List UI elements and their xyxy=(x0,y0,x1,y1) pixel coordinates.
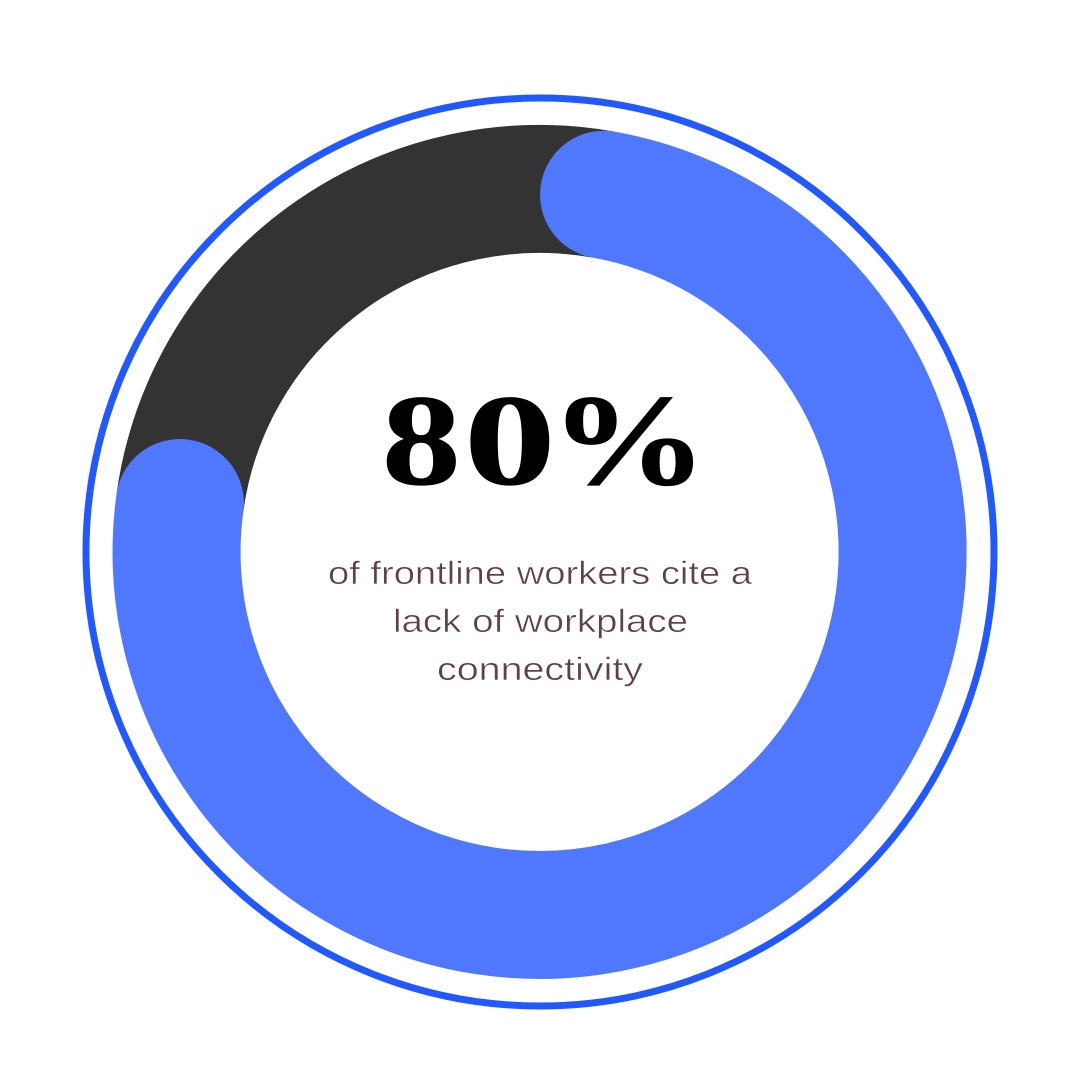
percent sign: % xyxy=(550,369,707,513)
dark segment: remaining 20% xyxy=(180,189,604,503)
description text xyxy=(328,555,752,687)
donut arc: 80% xyxy=(177,195,903,915)
line 2: lack of workplace xyxy=(393,603,688,639)
digit 0: 0 xyxy=(464,369,556,513)
line 3: connectivity xyxy=(437,651,643,687)
digit 8: 8 xyxy=(382,369,461,513)
outer blue ring xyxy=(86,98,994,1006)
line 1: of frontline workers cite a xyxy=(328,555,752,591)
statistic: 80% xyxy=(382,369,707,513)
